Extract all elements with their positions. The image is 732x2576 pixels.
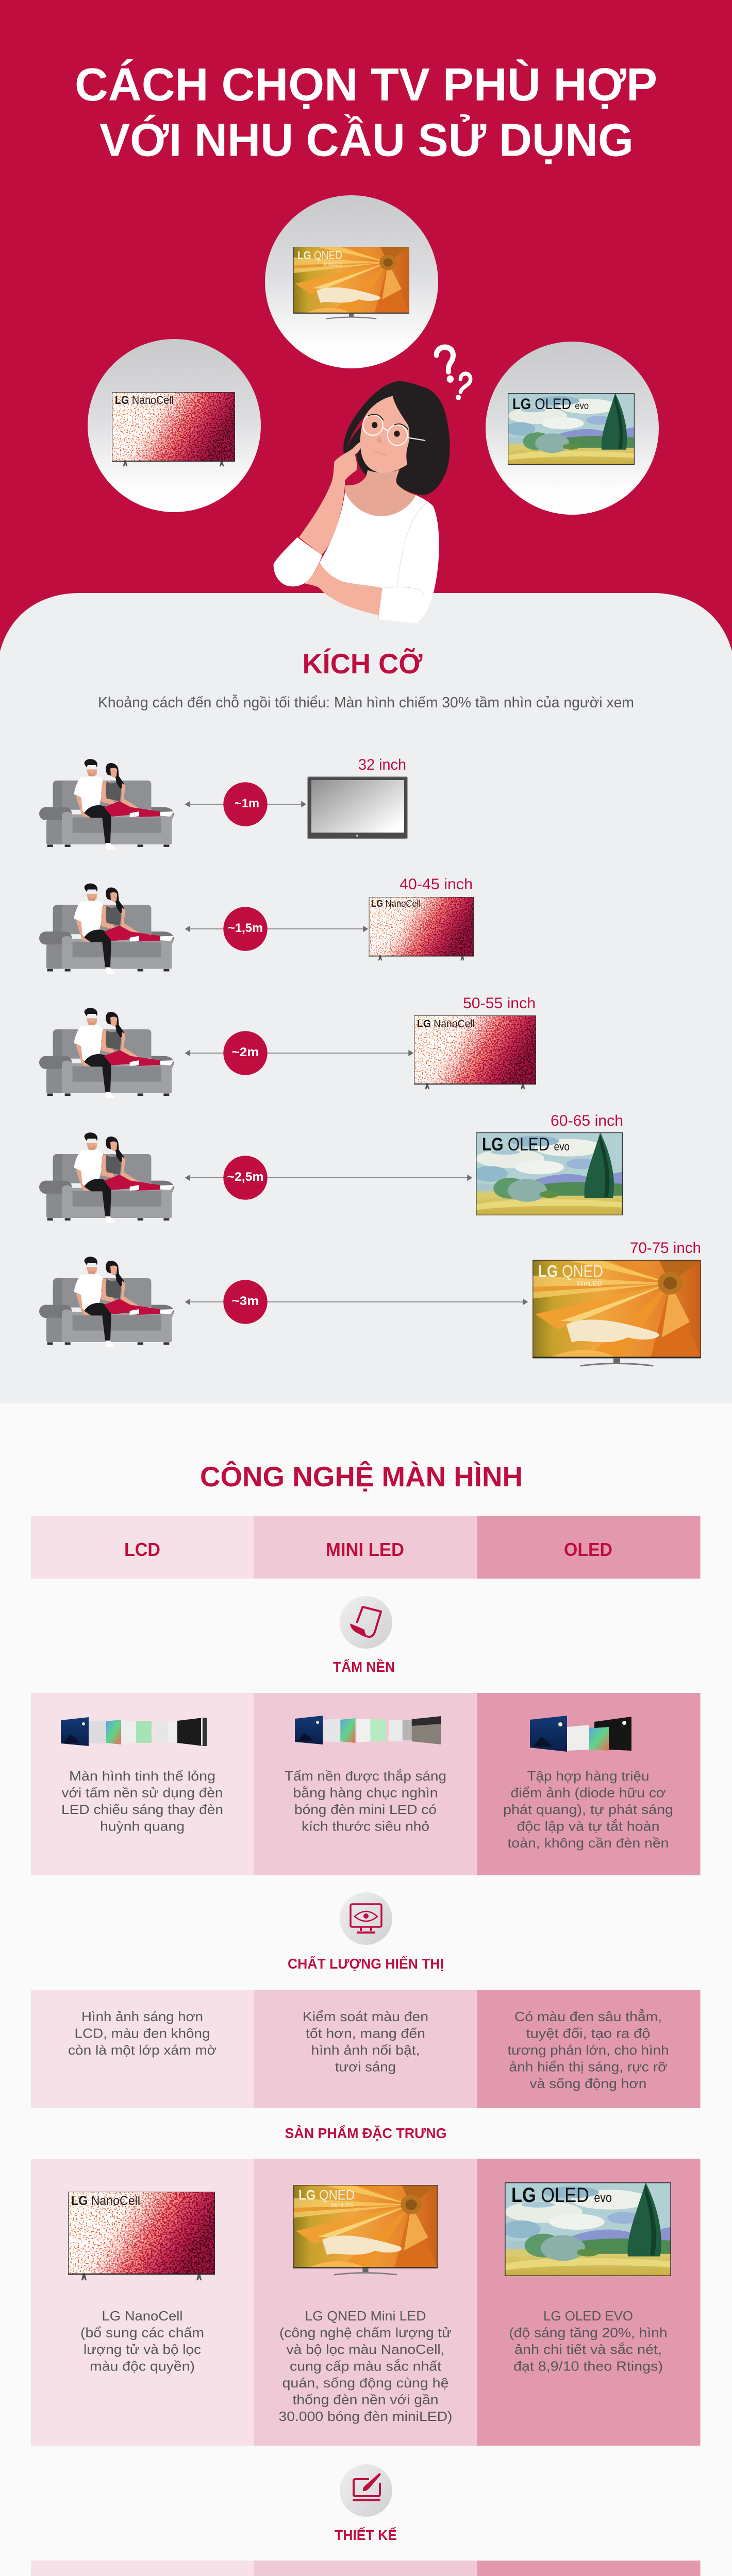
TV: NanoCell: LG NanoCell (417, 1018, 475, 1030)
TV: QNED: LG QNED (538, 1262, 603, 1281)
text: QNED Mini LED: quán, sống động cùng hệ (282, 2375, 448, 2391)
TV: OLED evo (502, 2182, 671, 2276)
distance bubble (223, 1280, 268, 1324)
circle: LG QNED TV: LG QNED (297, 249, 342, 262)
distance bubble (223, 1156, 268, 1200)
row: 2,5 m, 60-65 inch (39, 1112, 623, 1223)
text: OLED panel (503, 1768, 673, 1851)
text: OLED quality (507, 2008, 669, 2091)
distance bubble (223, 782, 268, 826)
TV: OLED evo (473, 1132, 623, 1215)
TV: 32 inch (308, 777, 407, 839)
icon: design (340, 2464, 392, 2517)
section: hero and size (0, 0, 732, 1403)
text: OLED EVO: LG OLED EVO (543, 2308, 633, 2324)
text: LCD panel: huỳnh quang (100, 1819, 185, 1834)
TV: NanoCell: LG NanoCell (71, 2194, 140, 2208)
table header: LCD (124, 1539, 160, 1560)
title: VỚI NHU CẦU SỬ DỤNG (99, 113, 634, 166)
distance bubble (223, 1031, 268, 1075)
table header: MINI LED (326, 1539, 404, 1560)
illustration: thinking woman (274, 347, 471, 623)
distance arrow (186, 1299, 527, 1304)
image: OLED layers (530, 1716, 631, 1752)
text: QNED Mini LED: và bộ lọc màu NanoCell, (287, 2342, 444, 2357)
text: NanoCell: (bổ sung các chấm (80, 2325, 204, 2340)
distance arrow (186, 802, 306, 807)
distance bubble: ~2m (232, 1045, 259, 1059)
icon: panel (340, 1596, 392, 1649)
distance bubble: ~3m (232, 1294, 259, 1308)
row: 1,5 m, 40-45 inch (39, 876, 474, 974)
text: LCD panel: LED chiếu sáng thay đèn (61, 1802, 223, 1817)
row: 3 m, 70-75 inch (39, 1240, 701, 1366)
distance arrow (186, 1050, 413, 1056)
text: OLED EVO: ảnh chi tiết và sắc nét, (514, 2342, 662, 2357)
text: OLED EVO: đạt 8,9/10 theo Rtings) (513, 2359, 663, 2374)
image: LCD layers (61, 1717, 207, 1746)
couple on sofa (39, 884, 174, 974)
circle: LG OLED evo TV: LG OLED evo (512, 396, 589, 413)
text: Mini LED panel: Tấm nền được thắp sáng (285, 1768, 446, 1784)
row: 2 m, 50-55 inch (39, 995, 536, 1098)
text: Mini LED panel: bóng đèn mini LED có (294, 1802, 437, 1817)
text: QNED Mini LED: cung cấp màu sắc nhất (290, 2359, 442, 2374)
text: QNED Mini LED: LG QNED Mini LED (305, 2308, 426, 2324)
subheading: featured products: SẢN PHẨM ĐẶC TRƯNG (285, 2125, 446, 2141)
icon: question marks (437, 347, 471, 400)
image: Mini LED layers (295, 1716, 441, 1744)
couple on sofa (39, 1132, 174, 1223)
TV: OLED evo: LG OLED evo (482, 1134, 570, 1155)
couple on sofa (39, 1008, 174, 1098)
heading: size: KÍCH CỠ (302, 648, 423, 680)
text: OLED EVO (509, 2308, 667, 2374)
hero panel (0, 0, 732, 721)
TV: QNED: LG QNED (298, 2188, 355, 2203)
TV: QNED: MiniLED (576, 1279, 602, 1287)
text: OLED panel: phát quang), tự phát sáng (503, 1802, 673, 1817)
TV: OLED evo: LG OLED evo (511, 2184, 612, 2207)
size label: 60-65 inch (551, 1112, 623, 1129)
TV: NanoCell (414, 1015, 536, 1089)
text: QNED Mini LED: (công nghệ chấm lượng tử (279, 2325, 452, 2340)
TV: NanoCell (68, 2192, 215, 2280)
TV: QNED: MiniLED (331, 2202, 354, 2209)
text: LCD panel: với tấm nền sử dụng đèn (62, 1785, 223, 1800)
text: OLED quality: tương phản lớn, cho hình (507, 2042, 669, 2058)
text: OLED quality: Có màu đen sâu thẳm, (514, 2008, 662, 2024)
text: LCD quality: còn là một lớp xám mờ (68, 2042, 217, 2058)
size label: 32 inch (358, 756, 406, 773)
title (75, 59, 657, 166)
circle: LG NanoCell TV: LG NanoCell (115, 394, 174, 406)
table row: panel (31, 1693, 700, 1875)
text: Mini LED panel: bằng hàng chục nghìn (293, 1785, 438, 1800)
subheading: design: THIẾT KẾ (335, 2527, 397, 2543)
text: OLED panel: Tập hợp hàng triệu (527, 1768, 650, 1784)
couple on sofa (39, 1257, 174, 1347)
section: screen technology (31, 1461, 700, 2576)
row: 1 m, 32 inch (39, 756, 407, 850)
text: LCD quality: LCD, màu đen không (74, 2026, 210, 2041)
text: Mini LED quality: hình ảnh nổi bật, (311, 2042, 420, 2058)
TV: NanoCell (369, 897, 474, 960)
table header: OLED (564, 1539, 612, 1560)
text: Mini LED panel: kích thước siêu nhỏ (302, 1819, 429, 1834)
table row: featured products (31, 2159, 700, 2446)
size label: 40-45 inch (400, 876, 473, 893)
couple on sofa (39, 759, 174, 850)
text: NanoCell: lượng tử và bộ lọc (84, 2342, 201, 2357)
table header (31, 1516, 700, 1579)
text: NanoCell: LG NanoCell (102, 2308, 182, 2324)
text: LCD quality (68, 2009, 217, 2058)
text: OLED quality: và sống động hơn (530, 2076, 646, 2091)
TV: NanoCell: LG NanoCell (371, 899, 421, 909)
text: Mini LED quality (303, 2009, 428, 2074)
table row: display quality (31, 1990, 700, 2108)
text: NanoCell (80, 2308, 204, 2374)
text: QNED Mini LED: 30.000 bóng đèn miniLED) (278, 2409, 453, 2424)
text: OLED quality: ảnh hiển thị sáng, rực rỡ (509, 2059, 667, 2074)
text: QNED Mini LED: thống đèn nền với gần (293, 2392, 438, 2407)
circle: LG QNED TV: MiniLED (324, 262, 342, 267)
text: OLED quality: tuyệt đối, tạo ra độ (526, 2026, 651, 2041)
distance arrow (186, 1175, 472, 1180)
heading: screen technology: CÔNG NGHỆ MÀN HÌNH (200, 1461, 523, 1493)
panel: size section background (0, 593, 732, 1403)
text: OLED EVO: (độ sáng tăng 20%, hình (509, 2325, 667, 2340)
text: Mini LED quality: tốt hơn, mang đến (306, 2026, 425, 2041)
circle: LG OLED evo TV (486, 342, 659, 515)
circle: LG NanoCell TV (88, 339, 261, 512)
text: LCD panel: Màn hình tinh thể lỏng (69, 1768, 215, 1784)
distance bubble (223, 907, 268, 951)
size label: 50-55 inch (463, 995, 536, 1012)
text: QNED Mini LED (278, 2308, 453, 2424)
text: OLED panel: toàn, không cần đèn nền (507, 1835, 669, 1851)
text: Mini LED quality: Kiểm soát màu đen (303, 2009, 428, 2024)
text: Mini LED quality: tươi sáng (335, 2059, 396, 2074)
distance bubble: ~1,5m (228, 921, 263, 935)
text: OLED panel: điểm ảnh (diode hữu cơ (510, 1785, 666, 1800)
text: NanoCell: màu độc quyền) (90, 2359, 195, 2374)
TV: QNED (293, 2185, 438, 2275)
table row: design (31, 2561, 700, 2576)
subheading: display quality: CHẤT LƯỢNG HIỂN THỊ (288, 1956, 444, 1972)
distance arrow (186, 926, 368, 931)
icon: display quality (340, 1892, 392, 1945)
circle: LG QNED TV (265, 195, 438, 368)
size label: 70-75 inch (630, 1240, 701, 1257)
text: LCD quality: Hình ảnh sáng hơn (81, 2009, 203, 2024)
text: OLED panel: độc lập và tự tắt hoàn (517, 1819, 660, 1834)
distance bubble: ~2,5m (227, 1170, 264, 1184)
TV: QNED (533, 1260, 701, 1366)
distance bubble: ~1m (235, 796, 259, 810)
text: LCD panel (61, 1768, 223, 1834)
title: CÁCH CHỌN TV PHÙ HỢP (75, 59, 657, 111)
subtitle: Khoảng cách đến chỗ ngồi tối thiểu: Màn hình chiếm 30% tầm nhìn của người xem (98, 694, 634, 711)
subheading: panel: TẤM NỀN (333, 1659, 395, 1675)
text: Mini LED panel (285, 1768, 446, 1834)
